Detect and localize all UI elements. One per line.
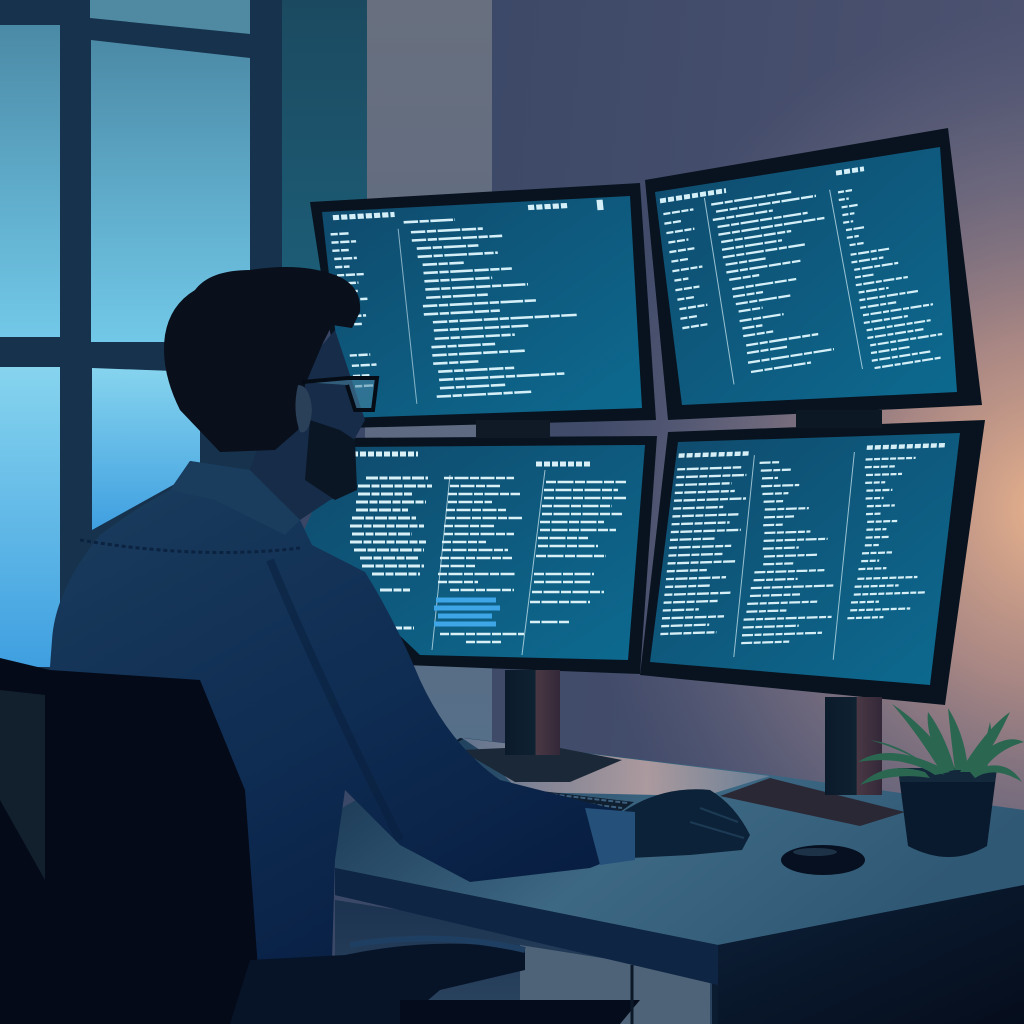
monitor: bottom right <box>640 420 985 705</box>
office chair <box>0 658 640 1024</box>
code lines: top right <box>660 159 945 399</box>
monitor: bottom left <box>300 436 657 674</box>
keyboard <box>490 785 634 812</box>
code lines: bottom right <box>657 445 947 665</box>
ear <box>295 385 312 432</box>
code lines: top left <box>328 200 620 407</box>
monitor: top right <box>645 128 982 420</box>
beard <box>305 420 357 500</box>
hand <box>618 789 750 858</box>
monitor neck: left <box>476 420 560 760</box>
person <box>40 267 750 1024</box>
code lines: bottom left <box>350 454 626 655</box>
shirt and torso <box>40 461 635 1024</box>
potted plant <box>858 704 1024 857</box>
desk <box>335 738 1024 1024</box>
window with glowing panes <box>0 0 282 680</box>
glasses <box>302 378 377 410</box>
hair <box>164 267 360 452</box>
mouse <box>781 845 865 875</box>
monitor neck: right <box>796 410 882 428</box>
monitor base: right <box>720 697 905 826</box>
neck and face <box>250 330 365 520</box>
monitor base: left <box>460 700 622 782</box>
monitor: top left <box>310 183 656 428</box>
